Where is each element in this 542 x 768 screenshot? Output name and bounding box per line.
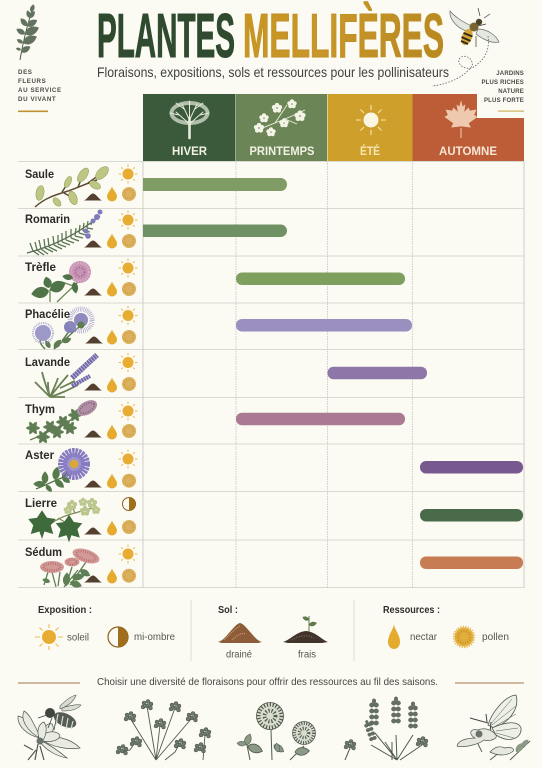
icon: nectar — [107, 234, 117, 248]
icon: drainé — [218, 623, 262, 643]
plant: thym — [26, 397, 100, 444]
row: Aster — [25, 448, 523, 493]
row: Lavande — [25, 353, 427, 397]
label: Romarin — [25, 212, 70, 226]
bar: Sédum — [420, 556, 523, 569]
row: Saule — [25, 164, 287, 208]
season: automne — [412, 94, 524, 162]
icon: pollen — [122, 282, 136, 296]
icon: sun — [118, 210, 138, 230]
text: right tagline: PLUS RICHES — [481, 80, 524, 86]
icon: nectar — [107, 568, 117, 584]
season: hiver — [143, 94, 236, 162]
heading: Exposition : — [38, 604, 92, 616]
plant: aster — [33, 452, 86, 493]
left tagline rule — [18, 110, 48, 112]
season: hiver: HIVER — [172, 144, 207, 158]
right tagline rule — [498, 110, 524, 112]
icon: bee — [450, 8, 499, 47]
label: nectar: nectar — [410, 632, 438, 643]
label: mi-ombre: mi-ombre — [134, 632, 175, 643]
text: left tagline: DES — [18, 69, 33, 76]
text: left tagline: AU SERVICE — [18, 87, 62, 94]
text: left tagline: FLEURS — [18, 78, 46, 85]
season: automne: AUTOMNE — [439, 144, 497, 158]
text: left tagline: DU VIVANT — [18, 96, 56, 103]
illustration: clover — [237, 702, 316, 760]
icon: soil — [84, 384, 102, 390]
icon: pollen — [122, 474, 136, 488]
icon: nectar — [107, 474, 117, 488]
plant: trèfle — [30, 261, 91, 302]
illustration: butterfly — [457, 695, 530, 760]
bar: Lavande — [328, 367, 427, 379]
text: right tagline: PLUS FORTE — [484, 98, 524, 104]
divider — [191, 600, 354, 661]
icon: soil — [84, 576, 102, 582]
plant: lavande — [35, 355, 97, 397]
icon: nectar — [388, 624, 400, 649]
illustration: umbels — [116, 700, 211, 760]
season: printemps — [236, 94, 327, 162]
plant: romarin — [27, 210, 102, 255]
title: PLANTES — [97, 1, 235, 71]
icon: soil — [84, 194, 102, 200]
icon: nectar — [107, 330, 117, 344]
text: right tagline — [481, 71, 524, 104]
panel: legend exposition — [35, 604, 175, 650]
icon: sun — [118, 544, 138, 564]
icon: pollen — [454, 627, 474, 647]
footer rules — [18, 682, 524, 684]
season: printemps: PRINTEMPS — [250, 144, 314, 158]
flight path — [432, 36, 488, 86]
icon: pollen — [122, 569, 136, 583]
table grid — [18, 161, 524, 588]
icon: nectar — [107, 424, 117, 440]
icon: soil — [85, 336, 103, 344]
bar: Aster — [420, 461, 523, 474]
icon: sun — [118, 306, 138, 325]
row: Trèfle — [25, 258, 405, 302]
plant: saule — [35, 164, 111, 208]
icon: pollen — [122, 234, 136, 248]
plant: sédum — [40, 545, 101, 589]
bar: Phacélie — [236, 319, 412, 332]
icon: pollen — [122, 377, 136, 391]
label: frais: frais — [298, 650, 316, 660]
panel: season header — [143, 94, 524, 162]
label: Lavande — [25, 355, 70, 369]
icon: nectar — [107, 186, 117, 202]
label: Phacélie — [25, 307, 70, 321]
icon: nectar — [107, 282, 117, 296]
row: Phacélie — [25, 306, 412, 350]
panel: legend ressources — [383, 604, 509, 649]
heading: Ressources : — [383, 604, 440, 616]
row: Sédum — [25, 544, 523, 589]
icon: sun — [118, 353, 138, 372]
icon: sun — [118, 402, 138, 420]
label: drainé: drainé — [226, 650, 252, 660]
illustration: flower and bee — [18, 695, 81, 760]
season: été: ÉTÉ — [360, 143, 380, 158]
label: Thym — [25, 402, 55, 416]
plant: lierre — [28, 498, 100, 542]
season: été — [328, 94, 412, 162]
icon: sun — [118, 258, 138, 278]
icon: soil — [84, 480, 102, 488]
bar: Saule — [143, 178, 287, 191]
icon: frais — [283, 615, 328, 643]
bar: Lierre — [420, 509, 523, 522]
text: left tagline — [18, 69, 62, 103]
icon: mi-ombre — [108, 627, 128, 647]
icon: soil — [84, 528, 102, 534]
bar: Thym — [236, 413, 405, 425]
plant: phacélie — [33, 309, 92, 350]
icon: soil — [84, 288, 102, 296]
bar: Romarin — [143, 224, 287, 237]
label: pollen: pollen — [482, 632, 509, 643]
icon: top-left sprig — [15, 4, 41, 60]
label: soleil: soleil — [67, 632, 89, 644]
label: Aster — [25, 448, 54, 462]
icon: nectar — [107, 378, 117, 392]
label: Sédum — [25, 545, 62, 559]
row: Lierre — [25, 496, 523, 542]
row: Romarin — [25, 210, 287, 255]
footer message: Choisir une diversité de floraisons pour offrir des ressources au fil des saisons. — [97, 676, 438, 688]
panel: legend sol — [218, 604, 328, 660]
icon: soil — [84, 240, 102, 248]
icon: pollen — [122, 187, 136, 201]
icon: pollen — [122, 330, 136, 344]
label: Saule — [25, 167, 54, 181]
icon: soil — [84, 430, 102, 438]
illustration: lavender — [344, 697, 428, 760]
heading: Sol : — [218, 604, 238, 616]
icon: sun — [118, 164, 138, 184]
bar: Trèfle — [236, 272, 405, 285]
subtitle: Floraisons, expositions, sols et ressources pour les pollinisateurs — [97, 64, 449, 80]
row: Thym — [25, 397, 405, 444]
icon: nectar — [107, 520, 117, 536]
icon: sun — [118, 450, 138, 468]
label: Trèfle — [25, 260, 56, 274]
text: right tagline: NATURE — [498, 89, 524, 95]
icon: mi-ombre — [122, 498, 136, 510]
icon: soleil — [35, 624, 63, 650]
icon: pollen — [122, 520, 136, 534]
icon: pollen — [122, 424, 136, 438]
label: Lierre — [25, 496, 57, 510]
text: right tagline: JARDINS — [496, 71, 524, 77]
